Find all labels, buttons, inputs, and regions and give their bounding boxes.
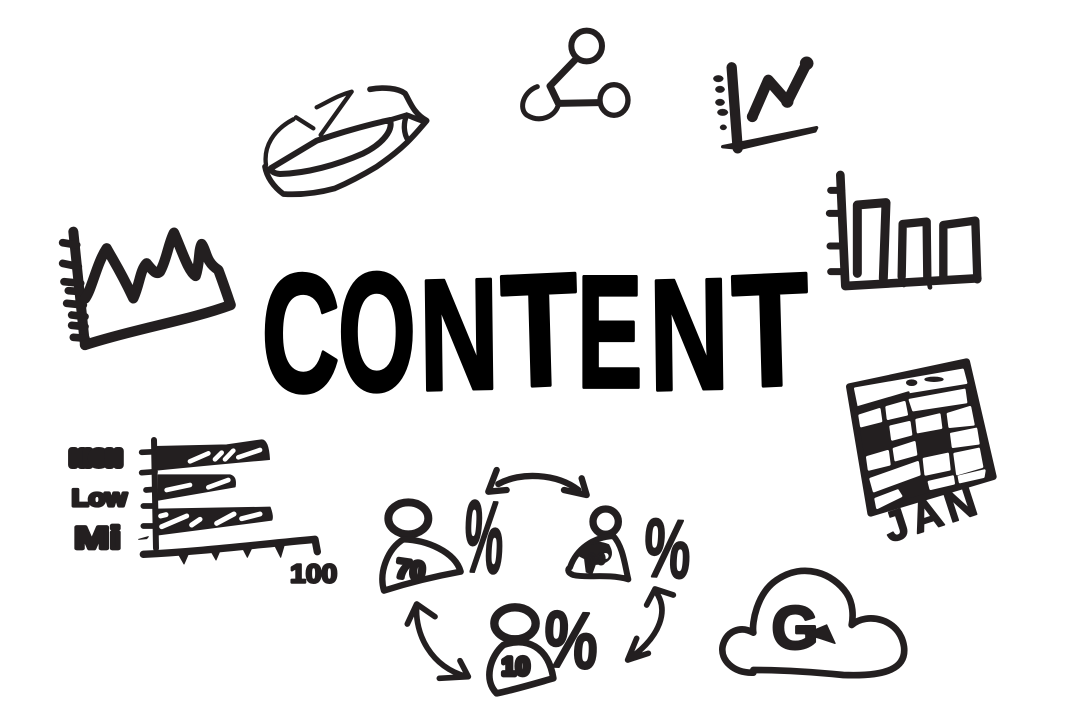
bar label: high: HIGH: [71, 447, 121, 470]
title: CONTENT: N: [418, 245, 500, 424]
title: CONTENT: C: [261, 238, 341, 428]
person: 10 percent: 10: [502, 653, 530, 681]
title: CONTENT: N: [648, 245, 730, 424]
person: 70 percent: 70: [394, 553, 427, 587]
calendar cells: [855, 370, 984, 508]
icon: cloud with G: [722, 571, 904, 675]
axis label: 100: 100: [290, 559, 337, 588]
bar label: low: Low: [72, 486, 128, 512]
title: CONTENT: O: [338, 239, 416, 426]
title: CONTENT: T: [730, 240, 811, 422]
icon: mountain area chart: [63, 232, 231, 345]
number label: 60: 60: [587, 549, 606, 569]
icon: calendar: [849, 362, 993, 551]
arrow: left double arrow: [407, 604, 468, 678]
icon: share network: [523, 31, 628, 119]
title: CONTENT: [261, 238, 811, 428]
person: 60 percent: [568, 509, 628, 579]
person: 70 percent: [382, 502, 461, 591]
arrow: right double arrow: [628, 589, 673, 660]
percent sign three: %: [542, 595, 600, 687]
icon: line chart: [713, 57, 817, 148]
calendar label: JAN: JAN: [878, 476, 987, 551]
person: 10 percent: [489, 607, 553, 693]
percent sign one: %: [462, 479, 507, 595]
title: CONTENT: T: [499, 240, 580, 422]
bar label: mid: Mi: [74, 520, 121, 555]
percent sign two: %: [642, 501, 693, 596]
cloud letter G: G: [772, 594, 818, 661]
arrow: top double arrow: [488, 470, 587, 495]
icon: horizontal bar chart: [71, 440, 337, 588]
people and percent cycle: [382, 470, 693, 693]
title: CONTENT: E: [577, 243, 642, 422]
icon: column chart: [829, 175, 977, 287]
icon: pie chart: [265, 88, 427, 194]
